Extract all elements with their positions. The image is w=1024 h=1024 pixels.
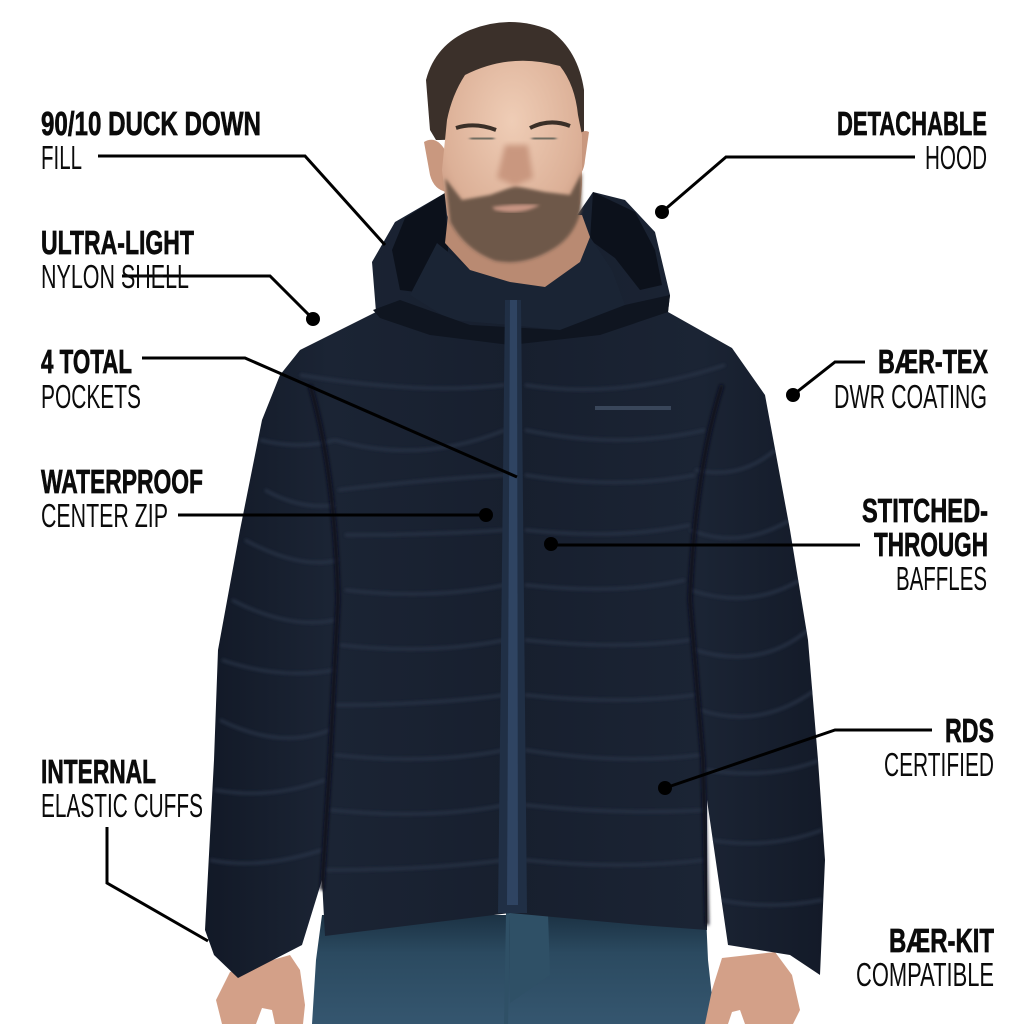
jeans — [312, 915, 715, 1024]
label: waterproof center zip: CENTER ZIP — [41, 497, 168, 534]
right hand — [705, 952, 800, 1024]
man wearing jacket — [205, 22, 825, 1024]
label: pockets — [41, 343, 141, 415]
label: internal elastic cuffs: ELASTIC CUFFS — [41, 787, 203, 824]
label: ultra-light nylon shell — [41, 224, 194, 295]
label: detachable hood — [837, 105, 987, 176]
label: pockets: 4 TOTAL — [41, 343, 132, 380]
left hand — [216, 955, 305, 1024]
beard — [445, 172, 582, 262]
mouth — [492, 204, 540, 212]
label: waterproof center zip — [41, 463, 203, 534]
label: waterproof center zip: WATERPROOF — [41, 463, 203, 500]
label: rds certified — [884, 712, 994, 783]
label: baer-tex dwr coating — [834, 343, 988, 415]
hood interior — [392, 193, 448, 295]
arm seams — [310, 385, 722, 925]
label: baer-kit compatible — [856, 922, 994, 993]
jeans fly — [504, 913, 550, 1024]
nose — [497, 145, 533, 186]
collar — [410, 237, 625, 330]
label: internal elastic cuffs: INTERNAL — [41, 753, 156, 790]
hood brim — [373, 295, 670, 345]
center zip — [498, 300, 527, 913]
label: duck down fill — [41, 105, 261, 176]
eyebrows — [456, 122, 570, 130]
eyes — [470, 138, 556, 139]
label: detachable hood: HOOD — [925, 139, 987, 176]
head — [442, 61, 582, 263]
neck — [445, 215, 590, 287]
hair — [426, 22, 584, 140]
label: pockets: POCKETS — [41, 378, 141, 415]
label: duck down fill: FILL — [41, 139, 82, 176]
chest logo — [595, 406, 671, 410]
jacket body — [205, 192, 825, 978]
label: stitched-through baffles — [862, 492, 988, 597]
jacket baffle lines — [210, 365, 822, 905]
leader lines — [98, 156, 932, 941]
label: internal elastic cuffs — [41, 753, 203, 824]
label: ultra-light nylon shell: NYLON SHELL — [41, 258, 189, 295]
label: duck down fill: 90/10 DUCK DOWN — [41, 105, 261, 142]
label: ultra-light nylon shell: ULTRA-LIGHT — [41, 224, 194, 261]
ears — [424, 131, 589, 192]
label: rds certified: RDS — [945, 712, 994, 749]
